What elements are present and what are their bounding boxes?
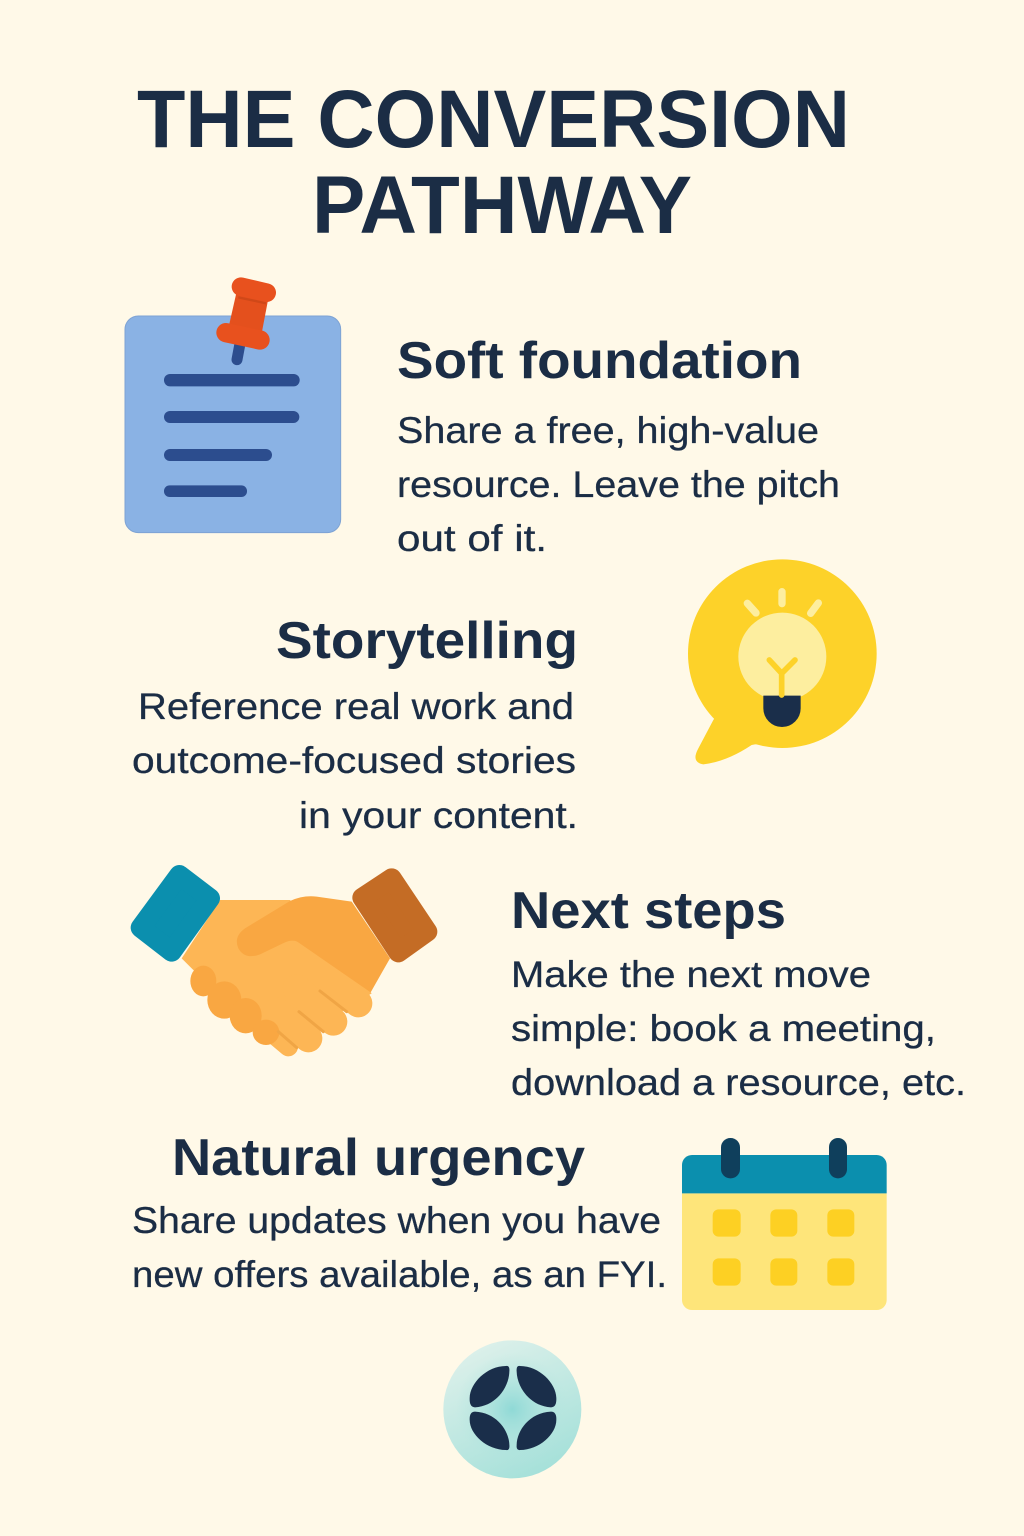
icon: calendar [682, 1138, 887, 1310]
text block: storytelling: Reference real work and [138, 686, 574, 727]
right hand [237, 896, 390, 992]
text block: natural urgency: new offers available, as an FYI. [132, 1254, 667, 1295]
text block: soft foundation: out of it. [397, 518, 547, 559]
logo [443, 1340, 581, 1478]
right cuff [362, 878, 427, 952]
text block: soft foundation [397, 332, 840, 559]
icon: lightbulb speech bubble [688, 559, 877, 764]
text block: storytelling: Storytelling [276, 612, 578, 670]
text block: storytelling [132, 612, 578, 836]
fingers [190, 966, 279, 1045]
icon: handshake [141, 875, 427, 1048]
text block: natural urgency: Share updates when you have [132, 1200, 661, 1241]
left hand [182, 900, 372, 1047]
text block: next steps: Next steps [511, 882, 786, 940]
text block: storytelling: in your content. [299, 795, 578, 836]
text block: natural urgency [132, 1129, 667, 1295]
icon: pinned note [125, 287, 341, 533]
left cuff [141, 875, 210, 952]
text block: next steps [511, 882, 966, 1103]
text block: next steps: simple: book a meeting, [511, 1008, 936, 1049]
text block: storytelling: outcome-focused stories [132, 740, 576, 781]
title: PATHWAY [312, 160, 692, 251]
text block: next steps: Make the next move [511, 954, 871, 995]
text block: next steps: download a resource, etc. [511, 1062, 966, 1103]
title [137, 74, 850, 251]
text block: natural urgency: Natural urgency [172, 1129, 585, 1187]
text block: soft foundation: Soft foundation [397, 332, 802, 390]
text block: soft foundation: resource. Leave the pitch [397, 464, 840, 505]
text block: soft foundation: Share a free, high-value [397, 410, 819, 451]
title: THE CONVERSION [137, 74, 850, 165]
